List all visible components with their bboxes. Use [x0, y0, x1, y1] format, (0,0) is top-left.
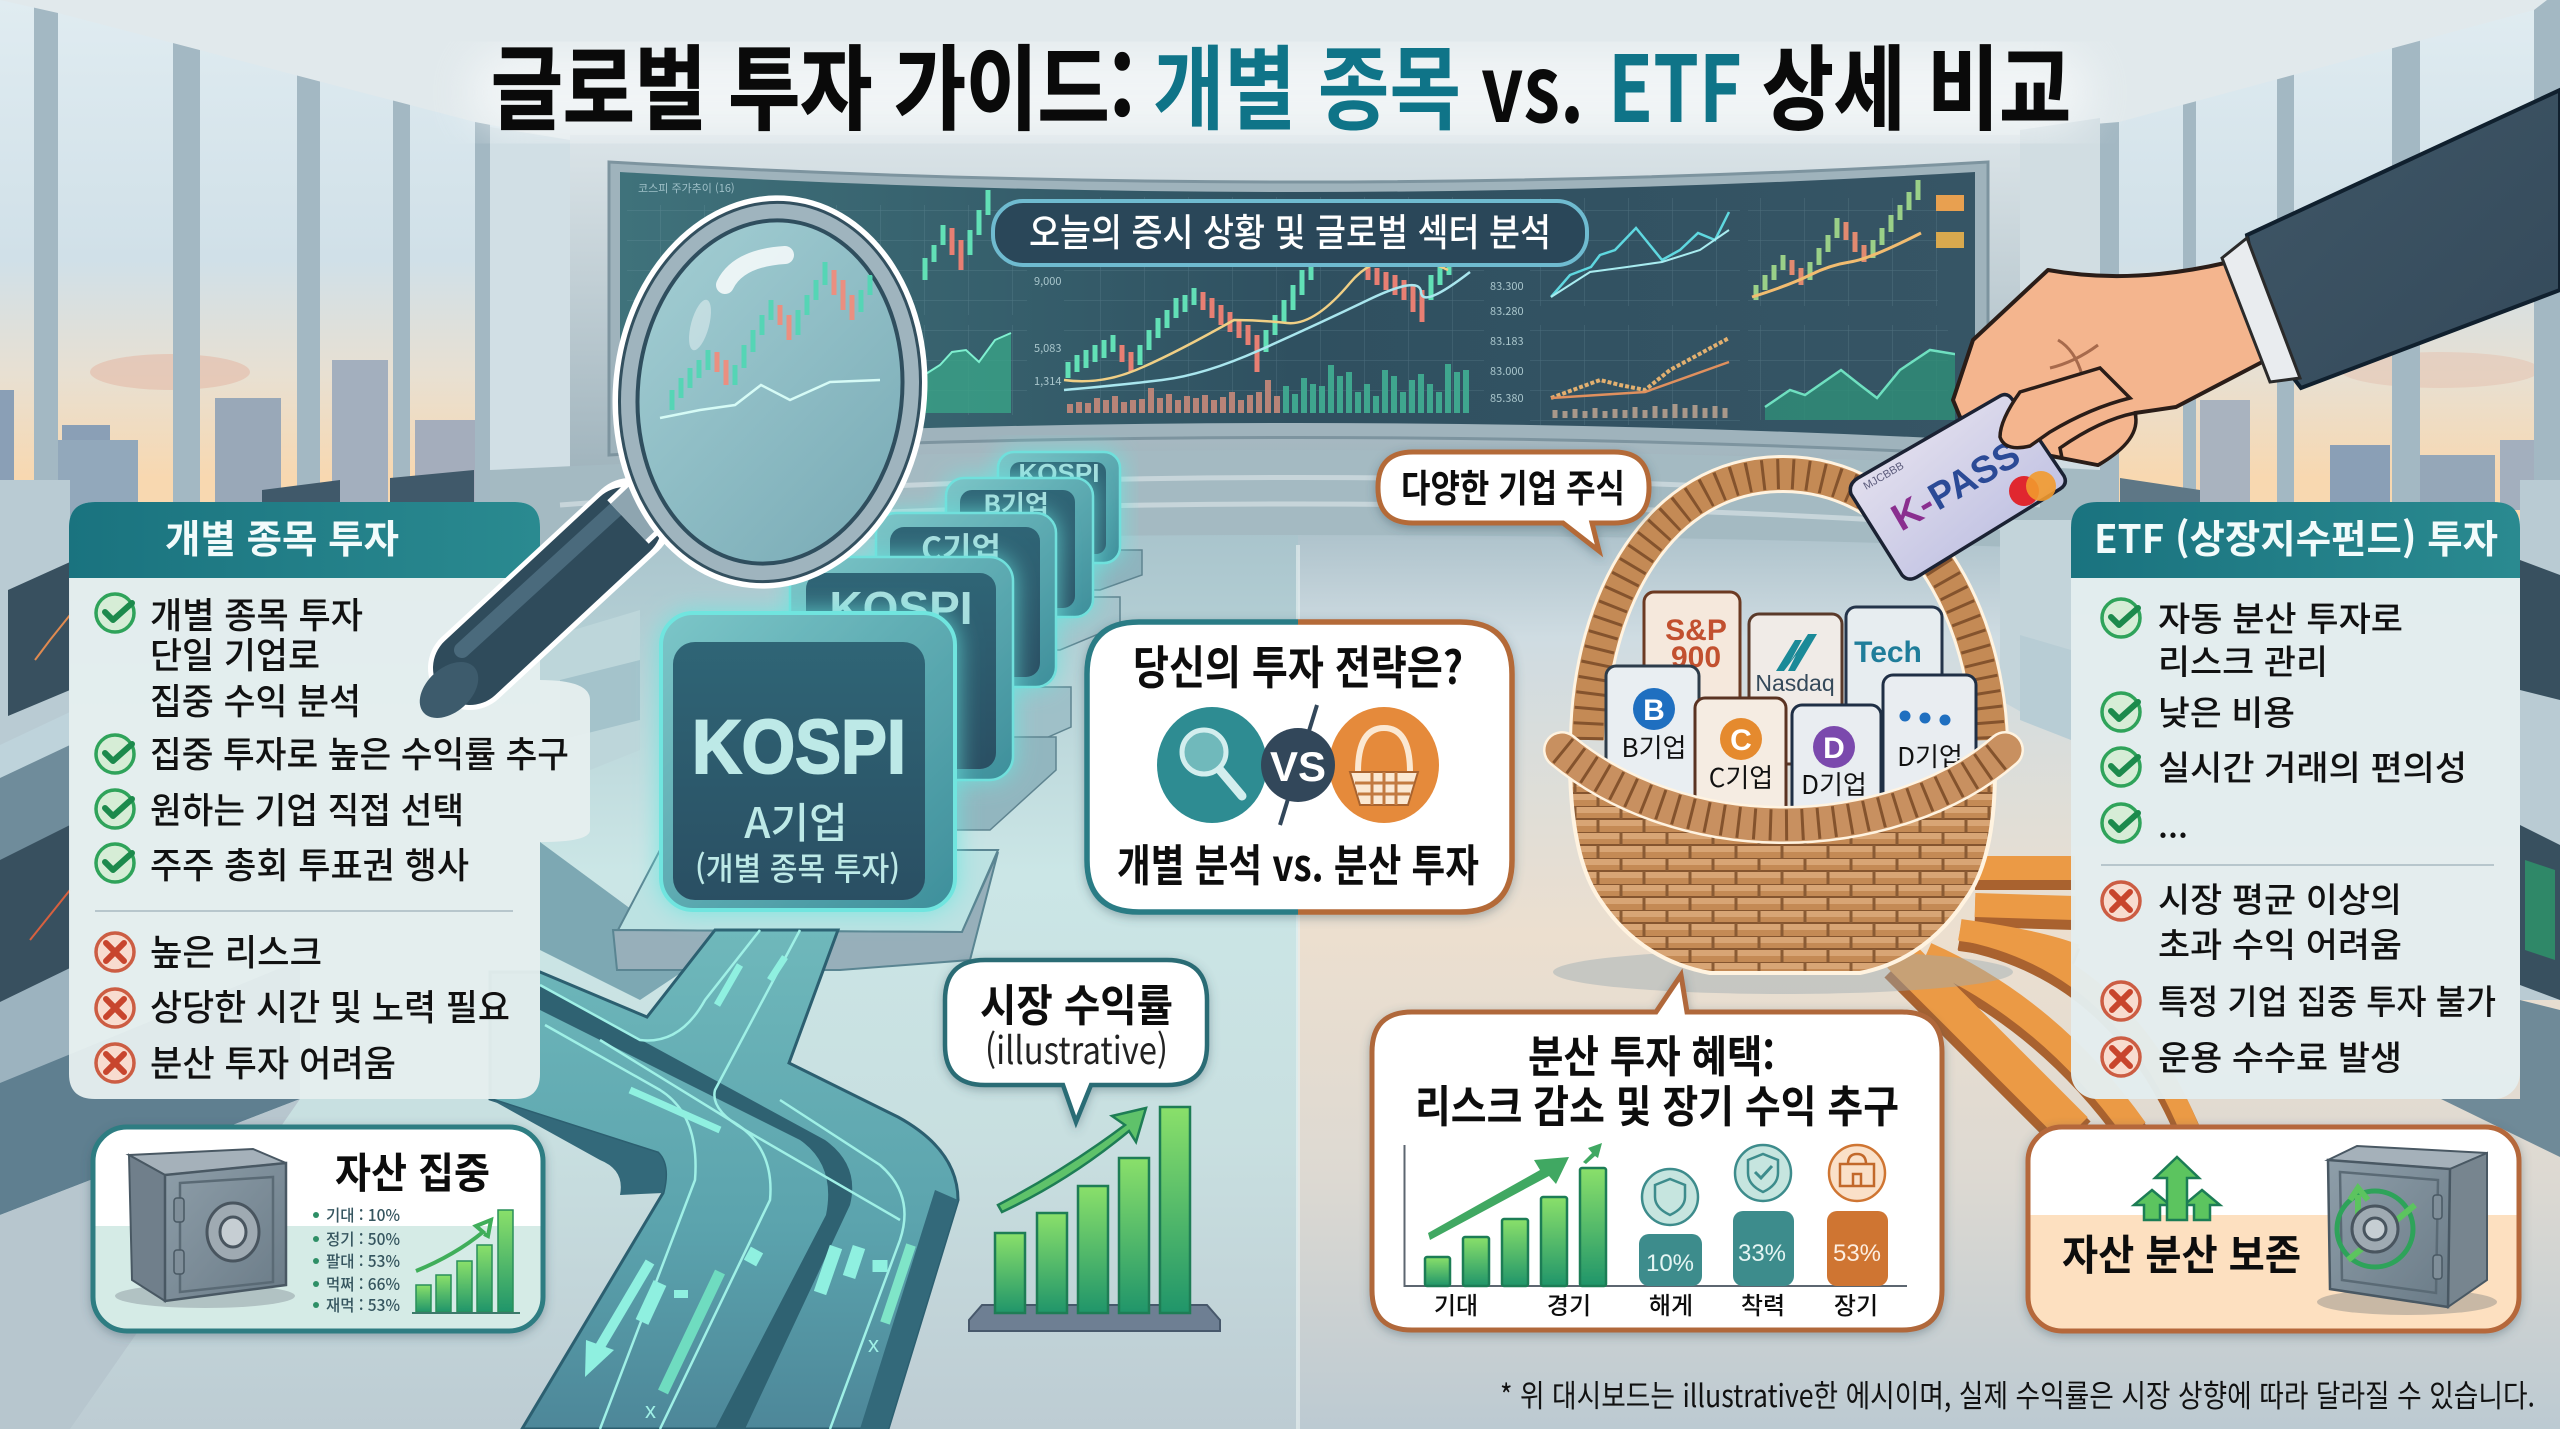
panel: individual stock investing — [69, 502, 590, 1099]
card: S&P — [1644, 592, 1740, 742]
icon: safe — [115, 1149, 295, 1308]
speech bubble: diverse stocks — [1378, 452, 1649, 551]
data list — [313, 1202, 400, 1316]
callout: diversification benefits: 리스크 감소 및 장기 수익 추구 — [1415, 1071, 1899, 1135]
callout: your strategy VS: 개별 분석 vs. 분산 투자 — [1117, 830, 1479, 894]
callout: asset diversification with safe — [2028, 1127, 2519, 1331]
cons list — [96, 924, 510, 1087]
callout: your strategy VS: 당신의 투자 전략은? — [1133, 632, 1463, 698]
card: Tech — [1846, 607, 1942, 757]
K-PASS card: K- — [1884, 482, 1942, 540]
main tile: KOSPI A기업 — [661, 613, 955, 910]
pros list: 개별 종목 투자 — [150, 587, 363, 639]
K-PASS card: PASS — [1922, 433, 2027, 519]
card: S&P: S&P — [1665, 614, 1727, 647]
arrow: rising trend — [998, 1108, 1146, 1212]
bar chart: 10% — [1646, 1250, 1694, 1277]
pros list: 낮은 비용 — [2158, 686, 2295, 735]
pros list: 주주 총회 투표권 행사 — [150, 837, 469, 889]
K-PASS card: MJCBBB — [1862, 460, 1906, 493]
bar chart — [1404, 1143, 1907, 1286]
chart: left candles — [627, 190, 1062, 415]
card: S&P: 900 — [1671, 641, 1721, 674]
axis labels: 착력 — [1741, 1286, 1785, 1321]
chart: main candlestick: 85.380 — [1490, 390, 1524, 406]
basket with stock cards — [1553, 474, 2013, 994]
main tile: KOSPI A기업: (개별 종목 투자) — [695, 844, 900, 890]
dashboard screen — [609, 162, 1988, 455]
speech bubble: market return — [945, 960, 1207, 1122]
cons list: 초과 수익 어려움 — [2158, 918, 2402, 967]
card: Tech: Tech — [1854, 636, 1922, 669]
callout: asset diversification with safe: 자산 분산 보존 — [2062, 1222, 2301, 1283]
cons list: 상당한 시간 및 노력 필요 — [150, 979, 510, 1031]
pros list: 자동 분산 투자로 — [2158, 592, 2403, 641]
pros list: 집중 수익 분석 — [150, 673, 361, 725]
pros list: 단일 기업로 — [150, 627, 320, 679]
card: C기업 — [1695, 698, 1786, 838]
main tile: KOSPI A기업: KOSPI — [692, 705, 906, 790]
card: D기업: D — [1823, 732, 1845, 765]
data list: 재먹 : 53% — [326, 1292, 400, 1316]
magnifying glass — [420, 195, 928, 718]
shirt cuff — [2222, 238, 2300, 382]
bar chart: 33% — [1738, 1240, 1786, 1267]
card: D기업 — [1792, 705, 1881, 845]
icon: VS badge: VS — [1270, 743, 1326, 790]
callout: asset concentration with safe: 자산 집중 — [335, 1140, 490, 1201]
cons list — [2102, 873, 2496, 1080]
pill: market status heading: 오늘의 증시 상황 및 글로벌 섹터 분석 — [1029, 202, 1551, 257]
card: C기업: C — [1730, 724, 1752, 757]
road: teal data highway — [490, 930, 958, 1429]
card: Nasdaq: Nasdaq — [1755, 670, 1835, 696]
screen label: top left: 코스피 주가추이 (16) — [638, 180, 735, 196]
chart: left candles: 5,083 — [1034, 340, 1062, 356]
suit sleeve — [2247, 90, 2560, 388]
card: D기업 dots: D기업 — [1897, 737, 1963, 774]
chart: top middle line — [1530, 198, 1740, 306]
panel heading — [69, 502, 540, 578]
arrow: road direction — [585, 1340, 614, 1377]
chart: bottom middle — [1530, 325, 1740, 425]
arrow: growth — [1428, 1157, 1569, 1240]
icon: long-term box — [1829, 1145, 1885, 1201]
title: vs. — [1481, 16, 1584, 149]
axis labels — [1434, 1286, 1878, 1321]
callout: diversification benefits: 분산 투자 혜택: — [1528, 1021, 1775, 1085]
chart: bottom right area — [1748, 325, 1960, 425]
basket body — [1562, 750, 2005, 973]
pros list — [96, 587, 569, 889]
speech bubble: diverse stocks: 다양한 기업 주식 — [1401, 458, 1625, 513]
card: Nasdaq — [1749, 614, 1842, 764]
card: D기업: D기업 — [1801, 765, 1867, 802]
title: ETF — [1608, 16, 1742, 149]
data list: 팔대 : 53% — [326, 1248, 400, 1272]
icon: three up arrows — [2134, 1157, 2220, 1220]
main tile: KOSPI A기업: A기업 — [744, 790, 848, 851]
chart: main candlestick: 83.280 — [1490, 303, 1524, 319]
axis labels: 경기 — [1547, 1286, 1591, 1321]
fingers and thumb — [2000, 368, 2136, 465]
chart: main candlestick: 83.000 — [1490, 363, 1524, 379]
cons list: 운용 수수료 발생 — [2158, 1031, 2402, 1080]
stock tiles row: back to front: C기업 — [921, 524, 1001, 570]
panel heading: ETF (상장지수펀드) 투자 — [2094, 509, 2498, 565]
bar chart: 53% — [1833, 1240, 1881, 1267]
bar chart: market return — [969, 1107, 1220, 1331]
callout: your strategy VS — [1087, 622, 1512, 912]
pros list: 원하는 기업 직접 선택 — [150, 782, 464, 834]
stock tiles row: back to front: B기업 — [983, 485, 1049, 522]
icon: shield — [1642, 1169, 1698, 1225]
pros list: 집중 투자로 높은 수익률 추구 — [150, 726, 569, 778]
data list: 먹쩌 : 66% — [326, 1271, 400, 1295]
K-PASS card — [1850, 395, 2065, 579]
card: D기업 dots — [1883, 675, 1976, 815]
icon: magnifier in teal circle — [1157, 707, 1267, 823]
data list: 정기 : 50% — [326, 1226, 400, 1250]
card: B기업: B — [1643, 694, 1665, 727]
panel heading: 개별 종목 투자 — [165, 509, 399, 565]
cons list: 분산 투자 어려움 — [150, 1035, 396, 1087]
axis labels: 장기 — [1834, 1286, 1878, 1321]
mini bar chart — [412, 1210, 520, 1313]
chart: main candlestick — [1064, 197, 1524, 413]
road: teal data highway: x — [868, 1332, 879, 1357]
speech bubble: market return: 시장 수익률 — [980, 970, 1173, 1034]
handle — [409, 480, 672, 729]
card: B기업 — [1606, 666, 1699, 806]
chart: main candlestick: 83.300 — [1490, 278, 1524, 294]
stock tiles row: back to front — [790, 452, 1142, 830]
icon: basket in orange circle — [1329, 707, 1439, 823]
speech bubble: market return: (illustrative) — [985, 1020, 1168, 1075]
title: 글로벌 투자 가이드: — [491, 16, 1135, 149]
platform: main tile base — [613, 850, 998, 970]
panel heading — [2071, 502, 2520, 578]
card: B기업: B기업 — [1622, 728, 1686, 765]
hand with suit sleeve holding K-PASS card — [1850, 90, 2560, 579]
callout: asset concentration with safe — [93, 1127, 543, 1331]
chart: left candles: 1,314 — [1034, 373, 1062, 389]
icon: VS badge — [1261, 705, 1335, 825]
pros list: 실시간 거래의 편의성 — [2158, 741, 2467, 790]
title — [470, 16, 2090, 149]
basket handle — [1588, 474, 1990, 740]
data list: 기대 : 10% — [326, 1202, 400, 1226]
panel: ETF investing — [2071, 502, 2520, 1099]
chart: left candles: 9,000 — [1034, 273, 1062, 289]
chart: top right candles — [1748, 180, 1964, 306]
cons list: 높은 리스크 — [150, 924, 322, 976]
icon: shield check — [1735, 1145, 1791, 1201]
lens chart — [660, 255, 880, 418]
stock tiles row: back to front: KOSPI — [829, 582, 973, 634]
axis labels: 기대 — [1434, 1286, 1478, 1321]
icon: safe with arrows — [2317, 1146, 2497, 1315]
title: 개별 종목 — [1153, 16, 1461, 149]
stock tiles row: back to front: KOSPI — [1019, 458, 1099, 488]
chart: main candlestick: 83.183 — [1490, 333, 1524, 349]
pros list — [2102, 592, 2467, 848]
side desks and monitors — [0, 470, 2560, 1429]
hand — [1953, 263, 2266, 465]
callout: diversification benefits — [1372, 975, 1942, 1330]
cons list: 특정 기업 집중 투자 불가 — [2158, 975, 2496, 1024]
card: C기업: C기업 — [1709, 758, 1773, 795]
orange streams from basket — [1900, 868, 2190, 1137]
road: teal data highway: x — [645, 1398, 656, 1423]
axis labels: 해게 — [1649, 1286, 1693, 1321]
pros list: ... — [2158, 799, 2188, 848]
title: 상세 비교 — [1762, 16, 2071, 149]
pros list: 리스크 관리 — [2158, 635, 2328, 684]
cons list: 시장 평균 이상의 — [2158, 873, 2402, 922]
